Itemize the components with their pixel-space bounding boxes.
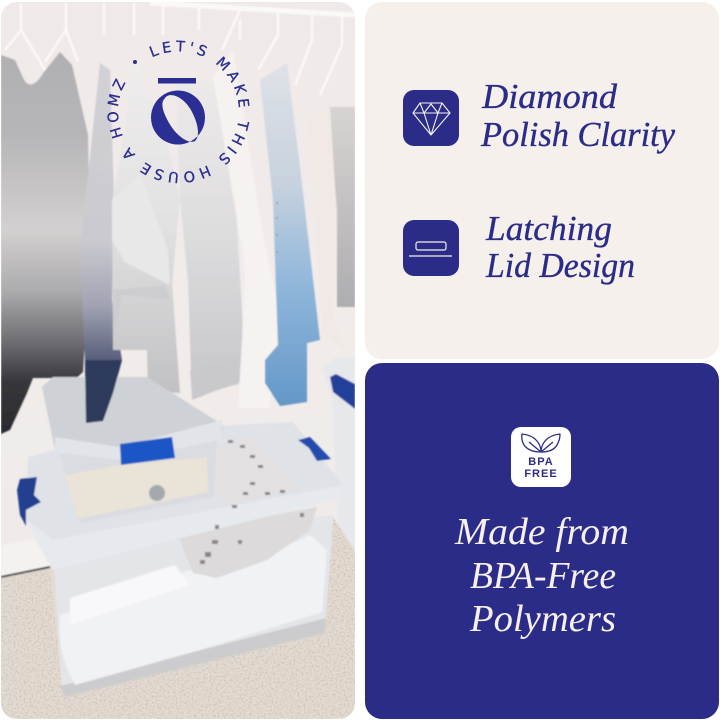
dark garment ends over lid — [85, 360, 122, 423]
icon: diamond — [403, 90, 459, 146]
icon: latching lid — [403, 220, 459, 276]
small storage box — [42, 360, 223, 523]
garment: navy shirt — [82, 63, 123, 376]
text: Made from BPA-Free Polymers — [454, 511, 629, 640]
wall background — [1, 2, 355, 719]
garment: ruffled top — [112, 139, 180, 394]
patterned pillow — [177, 507, 317, 578]
text: Latching Lid Design — [485, 209, 635, 285]
text: Diamond Polish Clarity: Polish Clarity — [480, 115, 675, 154]
panel: features — [365, 2, 719, 359]
icon: BPA free badge: FREE — [524, 468, 558, 480]
text: Made from BPA-Free Polymers: BPA-Free — [470, 555, 616, 597]
blue latch — [120, 437, 175, 465]
icon: BPA free badge: BPA — [528, 456, 554, 468]
text: Latching Lid Design: Lid Design — [485, 246, 635, 285]
garment: cream shirt — [328, 107, 334, 174]
carpet texture — [1, 515, 355, 719]
lid — [42, 376, 224, 448]
icon: BPA free badge — [511, 427, 571, 487]
text: Made from BPA-Free Polymers: Made from — [454, 511, 629, 553]
garment: grey tee — [178, 117, 243, 400]
garment: blue dip-dye shirt — [260, 63, 320, 406]
garment: white shirt — [214, 54, 278, 394]
right latch — [298, 437, 331, 461]
knit blanket — [65, 457, 208, 519]
garment: dark dress left — [1, 52, 90, 434]
text: Made from BPA-Free Polymers: Polymers — [469, 598, 616, 640]
white quilt — [59, 535, 327, 685]
left latch — [17, 477, 41, 526]
logo dot — [133, 60, 137, 64]
logo ring — [151, 90, 205, 144]
hanging rail and hangers — [5, 3, 355, 95]
circular slogan — [118, 51, 239, 172]
large storage box — [17, 422, 343, 697]
text: Diamond Polish Clarity — [480, 77, 675, 154]
pattern dots — [200, 440, 304, 564]
carpet floor — [1, 517, 355, 719]
garment: grey linen far right — [328, 107, 355, 307]
lid — [24, 422, 338, 540]
panel: BPA free — [365, 363, 719, 719]
text: Diamond Polish Clarity: Diamond — [481, 77, 618, 116]
logo bar — [158, 78, 196, 84]
text: Latching Lid Design: Latching — [485, 209, 612, 248]
right-hand storage box — [322, 358, 355, 550]
logo: round stamp: LET'S MAKE THIS HOUSE A HOMZ — [107, 40, 250, 184]
panel: closet photo — [1, 2, 355, 719]
baseboard — [1, 565, 50, 576]
